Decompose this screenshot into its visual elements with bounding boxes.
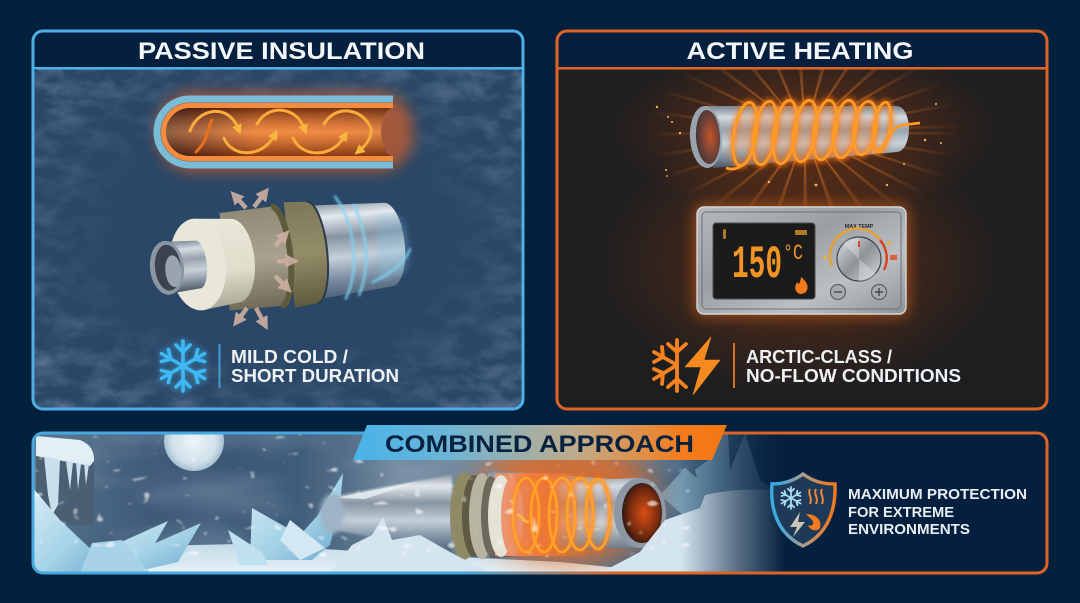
moon [164,434,224,471]
panel: active heating [557,31,1047,409]
label: mild cold: MILD COLD / [231,346,348,367]
thermostat screen [713,223,815,299]
snow mounds [330,490,800,573]
label: maximum protection [848,487,1027,538]
snow ground [146,544,612,572]
ice shards [33,473,343,573]
label: arctic-class [746,346,961,386]
winter scene [34,434,780,572]
heading badge: combined approach [353,425,727,460]
label: maximum protection: MAXIMUM PROTECTION [848,487,1027,503]
diagram: insulated pipe cutaway [144,189,415,322]
label: arctic-class: ARCTIC-CLASS / [746,346,892,367]
temperature dial [822,224,897,300]
thermostat screen: 150 [732,239,782,291]
icon: snowflake [158,341,208,391]
panel: combined approach [33,411,1047,573]
divider [733,343,735,388]
icon: protection shield [772,474,835,546]
frost texture [33,68,523,409]
heading badge: combined approach: COMBINED APPROACH [385,431,694,458]
divider [218,344,220,388]
icon: half snowflake and lightning bolt [654,337,720,395]
ice tower [36,436,94,525]
falling snow [33,433,693,558]
label: mild cold [231,346,399,386]
label: mild cold: SHORT DURATION [231,365,399,386]
temperature dial: MAX TEMP [845,224,874,230]
label: maximum protection: FOR EXTREME [848,505,954,521]
heading: passive insulation: PASSIVE INSULATION [138,38,425,65]
label: maximum protection: ENVIRONMENTS [848,522,970,538]
arrows: heat loss [236,194,291,323]
diagram: digital thermostat [694,204,909,317]
right ice columns [662,434,770,514]
thermostat screen: °C [783,241,803,266]
diagram: convection section pipe [157,92,413,172]
diagram: heat-traced pipe [656,99,942,186]
panel: passive insulation [33,31,523,409]
heading: active heating: ACTIVE HEATING [686,38,914,65]
heat rays [718,76,892,188]
label: arctic-class: NO-FLOW CONDITIONS [746,365,961,386]
triple-layer pipe [317,460,674,572]
